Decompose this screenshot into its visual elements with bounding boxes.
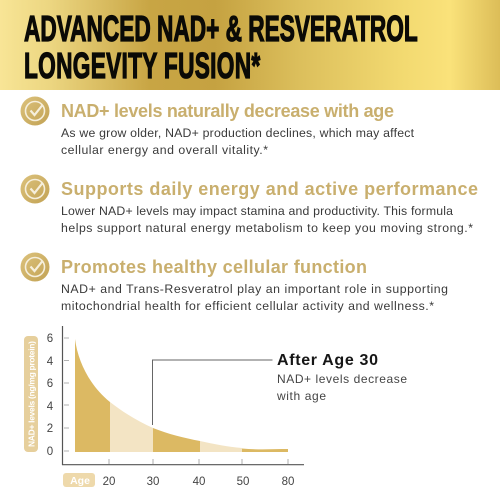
body text: Lower NAD+ levels may impact stamina and productivity. This formula — [61, 204, 453, 218]
x axis ticks — [109, 459, 288, 464]
x axis labels: 40 — [193, 476, 205, 488]
age pill — [63, 473, 95, 487]
y axis labels: 4 — [47, 401, 54, 413]
y axis ticks — [64, 338, 69, 451]
body text — [61, 282, 448, 313]
x axis labels: 30 — [147, 476, 159, 488]
body text — [61, 126, 415, 157]
y axis pill label: NAD+ levels (ng/mg protein) — [26, 341, 36, 447]
x axis labels: 50 — [237, 476, 249, 488]
area segments — [75, 339, 288, 452]
icon: check badge — [20, 252, 50, 282]
icon: check badge — [20, 96, 50, 126]
y axis labels: 6 — [47, 333, 53, 345]
body text: cellular energy and overall vitality.* — [61, 143, 268, 157]
body text: helps support natural energy metabolism to keep you moving strong.* — [61, 221, 473, 235]
callout: with age — [276, 389, 326, 403]
y axis labels: 2 — [47, 423, 53, 435]
title — [24, 10, 418, 86]
title: ADVANCED NAD+ & RESVERATROL — [24, 10, 418, 49]
body text: As we grow older, NAD+ production declines, which may affect — [61, 126, 415, 140]
header band — [0, 0, 500, 90]
callout: After Age 30 — [277, 352, 378, 369]
section: daily energy — [20, 174, 478, 235]
title: LONGEVITY FUSION* — [24, 47, 260, 86]
x axis labels: 80 — [282, 476, 294, 488]
section: NAD+ levels decrease — [20, 96, 415, 157]
heading: Promotes healthy cellular function — [61, 257, 367, 277]
body text: NAD+ and Trans-Resveratrol play an important role in supporting — [61, 282, 448, 296]
connector — [152, 360, 272, 425]
y axis labels: 6 — [47, 378, 53, 390]
body text — [61, 204, 473, 235]
chart: NAD+ decline curve — [24, 326, 407, 488]
callout — [276, 352, 407, 403]
body text: mitochondrial health for efficient cellular activity and wellness.* — [61, 299, 434, 313]
section: cellular function — [20, 252, 448, 313]
y axis pill label — [24, 336, 38, 452]
callout: NAD+ levels decrease — [277, 372, 407, 386]
x axis labels — [103, 476, 294, 488]
x axis labels: 20 — [103, 476, 115, 488]
y axis labels: 0 — [47, 446, 53, 458]
heading: NAD+ levels naturally decrease with age — [61, 101, 394, 121]
y axis labels: 4 — [47, 356, 54, 368]
y axis labels — [47, 333, 54, 458]
icon: check badge — [20, 174, 50, 204]
axes — [62, 326, 304, 465]
heading: Supports daily energy and active performance — [61, 179, 478, 199]
age pill: Age — [70, 475, 90, 487]
